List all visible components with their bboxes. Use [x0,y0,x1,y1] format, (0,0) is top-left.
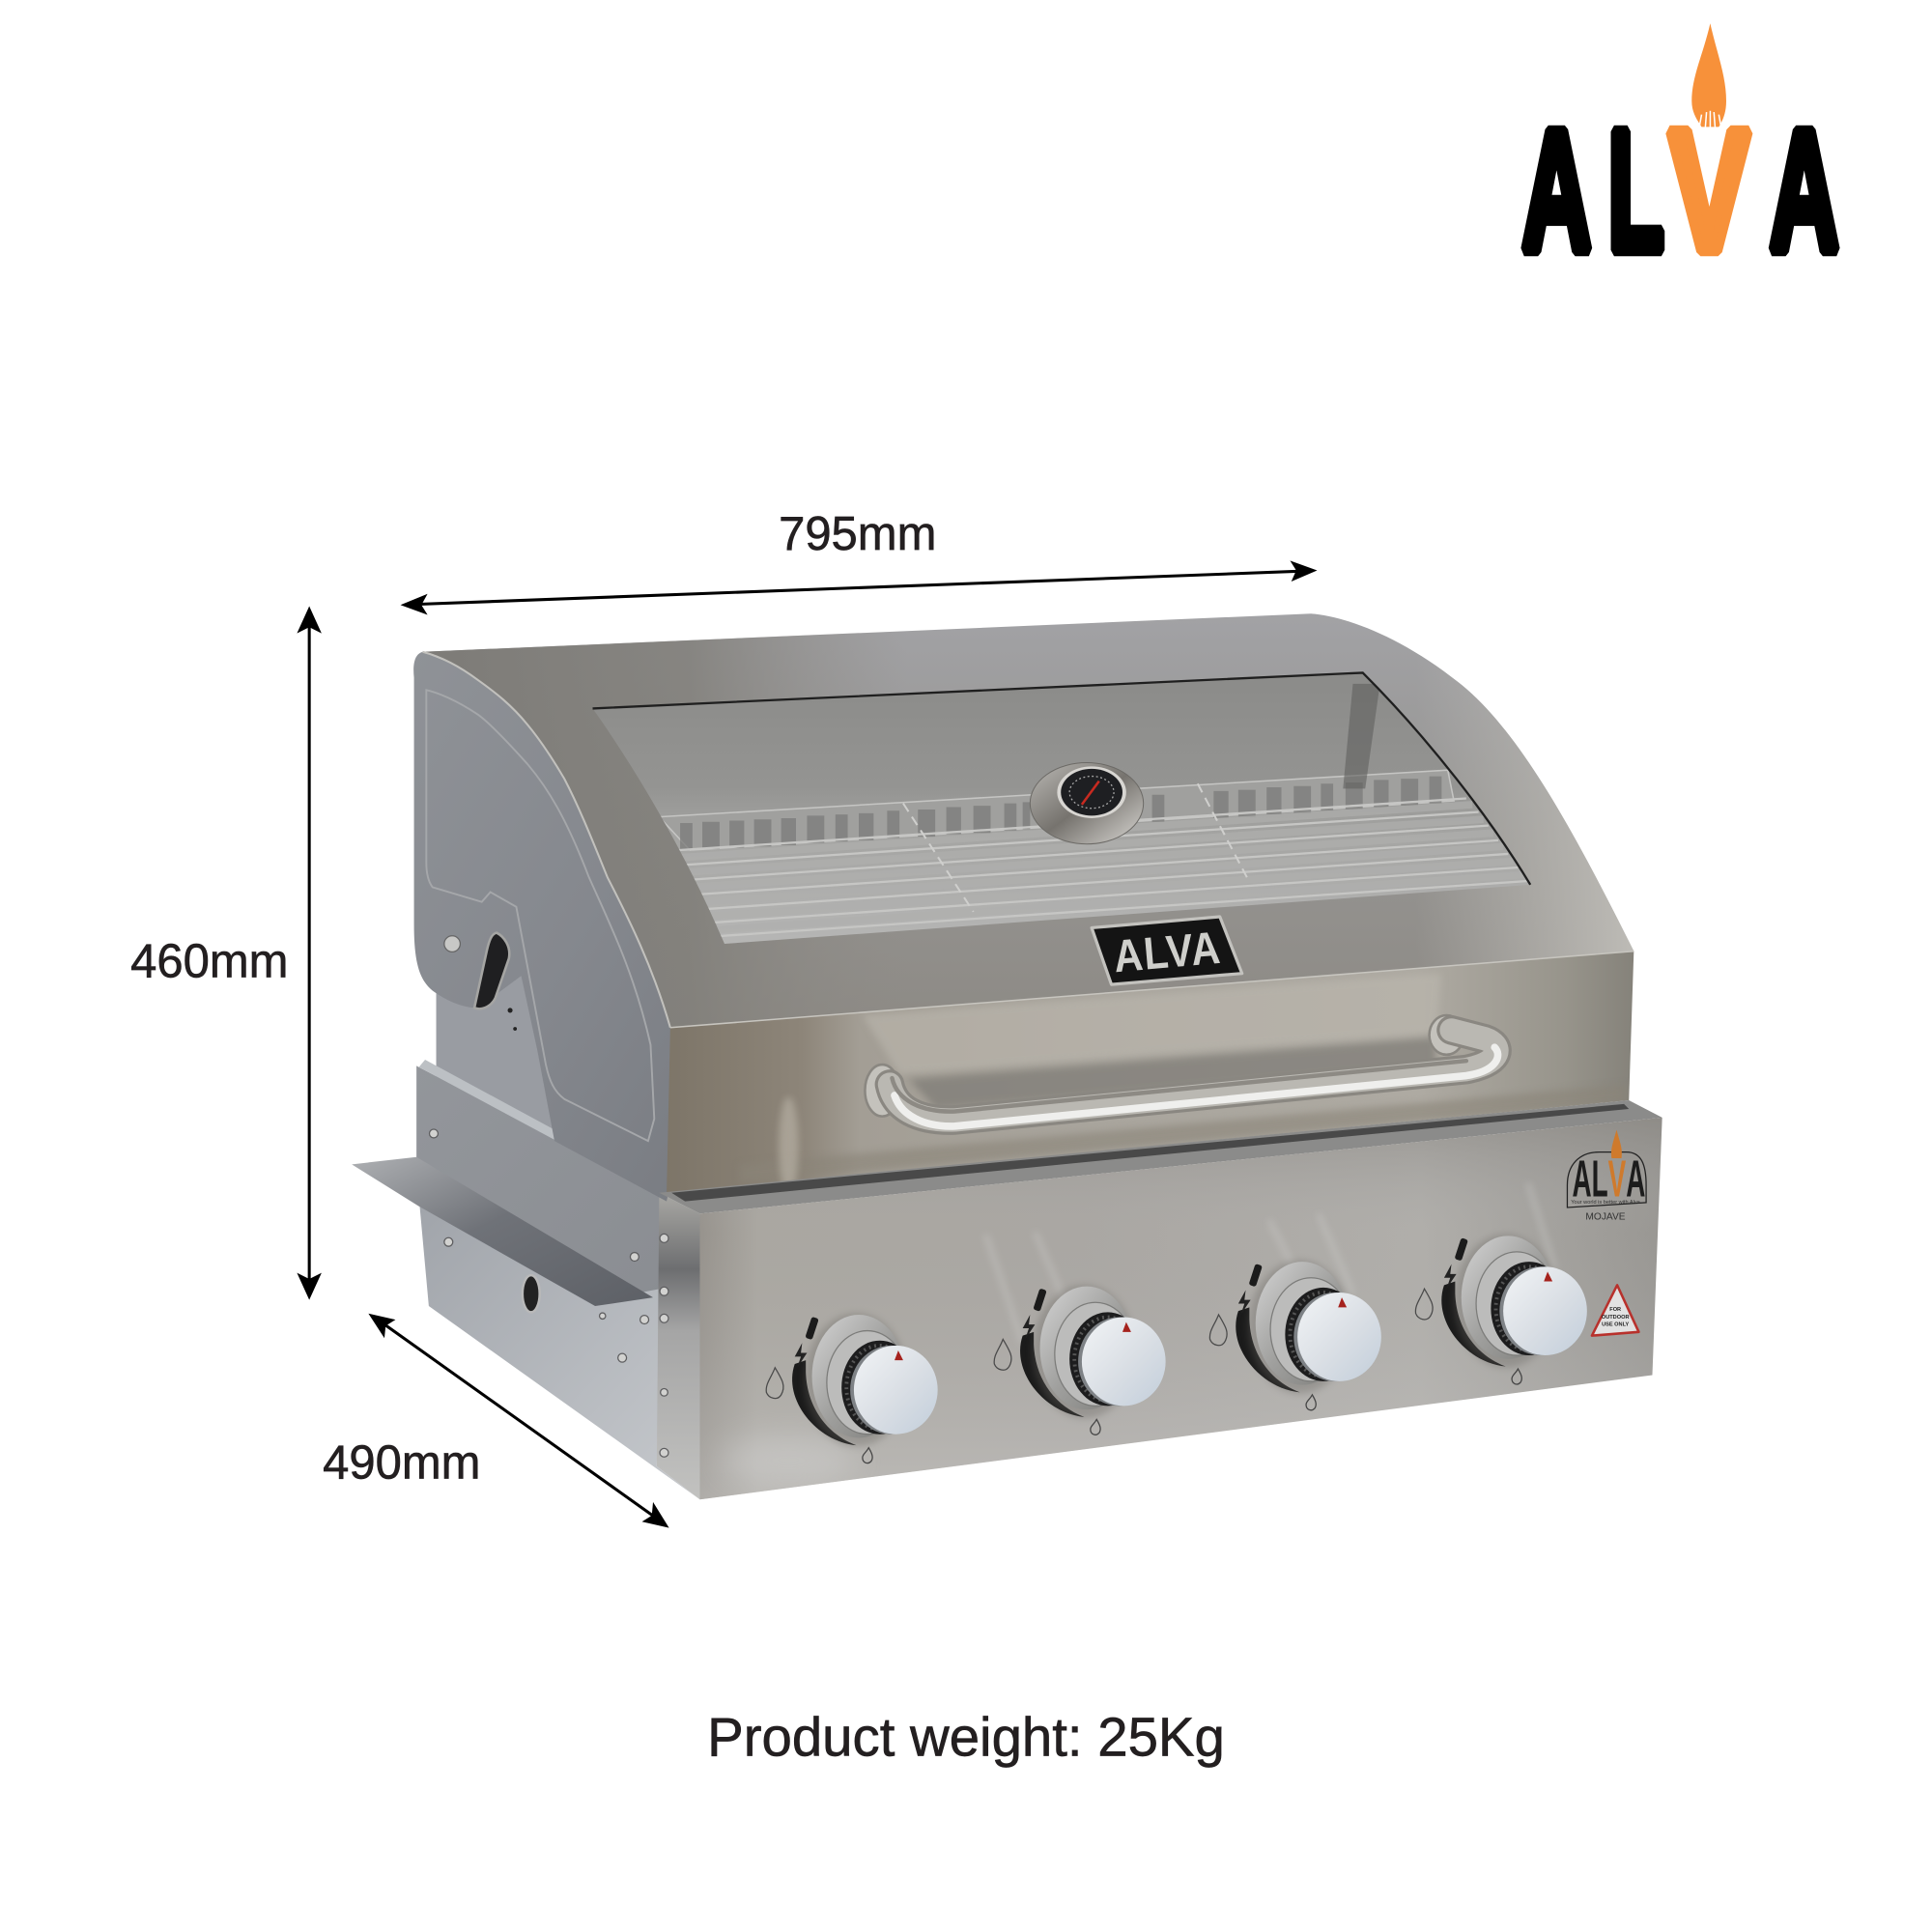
logo wordmark: A [1521,94,1591,287]
hinge screw [444,936,460,952]
ledge shadow [671,1104,1629,1202]
brushed steel shading [699,1118,1662,1499]
control knob 4 [1415,1235,1587,1384]
warning triangle: USE ONLY [1602,1321,1630,1327]
firebox upper side wall [416,1065,667,1309]
lid silver trim [423,652,670,1028]
lid front face [667,952,1634,1193]
hinge slot [474,933,509,1009]
text: width label: 795mm [779,508,936,560]
text: height label: 460mm [130,935,288,987]
arrow: depth dimension [368,1314,669,1528]
lid shell [423,613,1634,1028]
text: depth label: 490mm [323,1437,480,1490]
grill product illustration [352,613,1662,1499]
logo wordmark: A [1770,94,1839,287]
arrow: height dimension [297,607,322,1300]
warning triangle: FOR [1609,1307,1621,1313]
ALVA nameplate [1092,917,1242,984]
thermometer [1030,763,1144,844]
warning triangle [1592,1285,1638,1336]
text: product weight: Product weight: 25Kg [707,1707,1225,1768]
glass window [593,672,1530,944]
ALVA nameplate: ALVA [1112,923,1223,982]
wall top lit strip [419,1060,557,1140]
lid front edge highlight [670,952,1634,1028]
lid front face reflections [777,978,1621,1180]
icon: logo flame [1691,23,1726,128]
model logo label [1567,1130,1646,1223]
side panel emboss [426,690,654,1141]
ALVA brand logo [1521,23,1839,288]
control knob 2 [994,1285,1166,1435]
logo wordmark: L [1608,95,1664,288]
mounting flange [352,1157,653,1306]
warning triangle: OUTDOOR [1602,1315,1630,1321]
bracket holes [508,977,517,1031]
hinge bracket [437,974,557,1140]
control knob 3 [1209,1261,1381,1410]
arrow: width dimension [401,560,1318,614]
firebox front corner strip [657,1193,699,1499]
lid side panel [413,652,739,1202]
glass frame edge [593,672,1530,885]
model logo label: Your world is better with Alva [1571,1200,1641,1206]
firebox top ledge [659,1100,1662,1213]
logo wordmark [1521,94,1839,288]
grill grates seen through the glass [659,684,1528,936]
firebox lower side wall [419,1198,699,1499]
lid handle [865,1015,1498,1126]
model logo label: MOJAVE [1585,1212,1626,1223]
model logo label: ALVA [1573,1151,1645,1208]
side wall rivets and hole [430,1129,668,1457]
control knob 1 [766,1314,938,1463]
firebox front panel [699,1118,1662,1499]
logo wordmark: V [1669,94,1749,287]
lid shell shading [423,613,1634,1028]
